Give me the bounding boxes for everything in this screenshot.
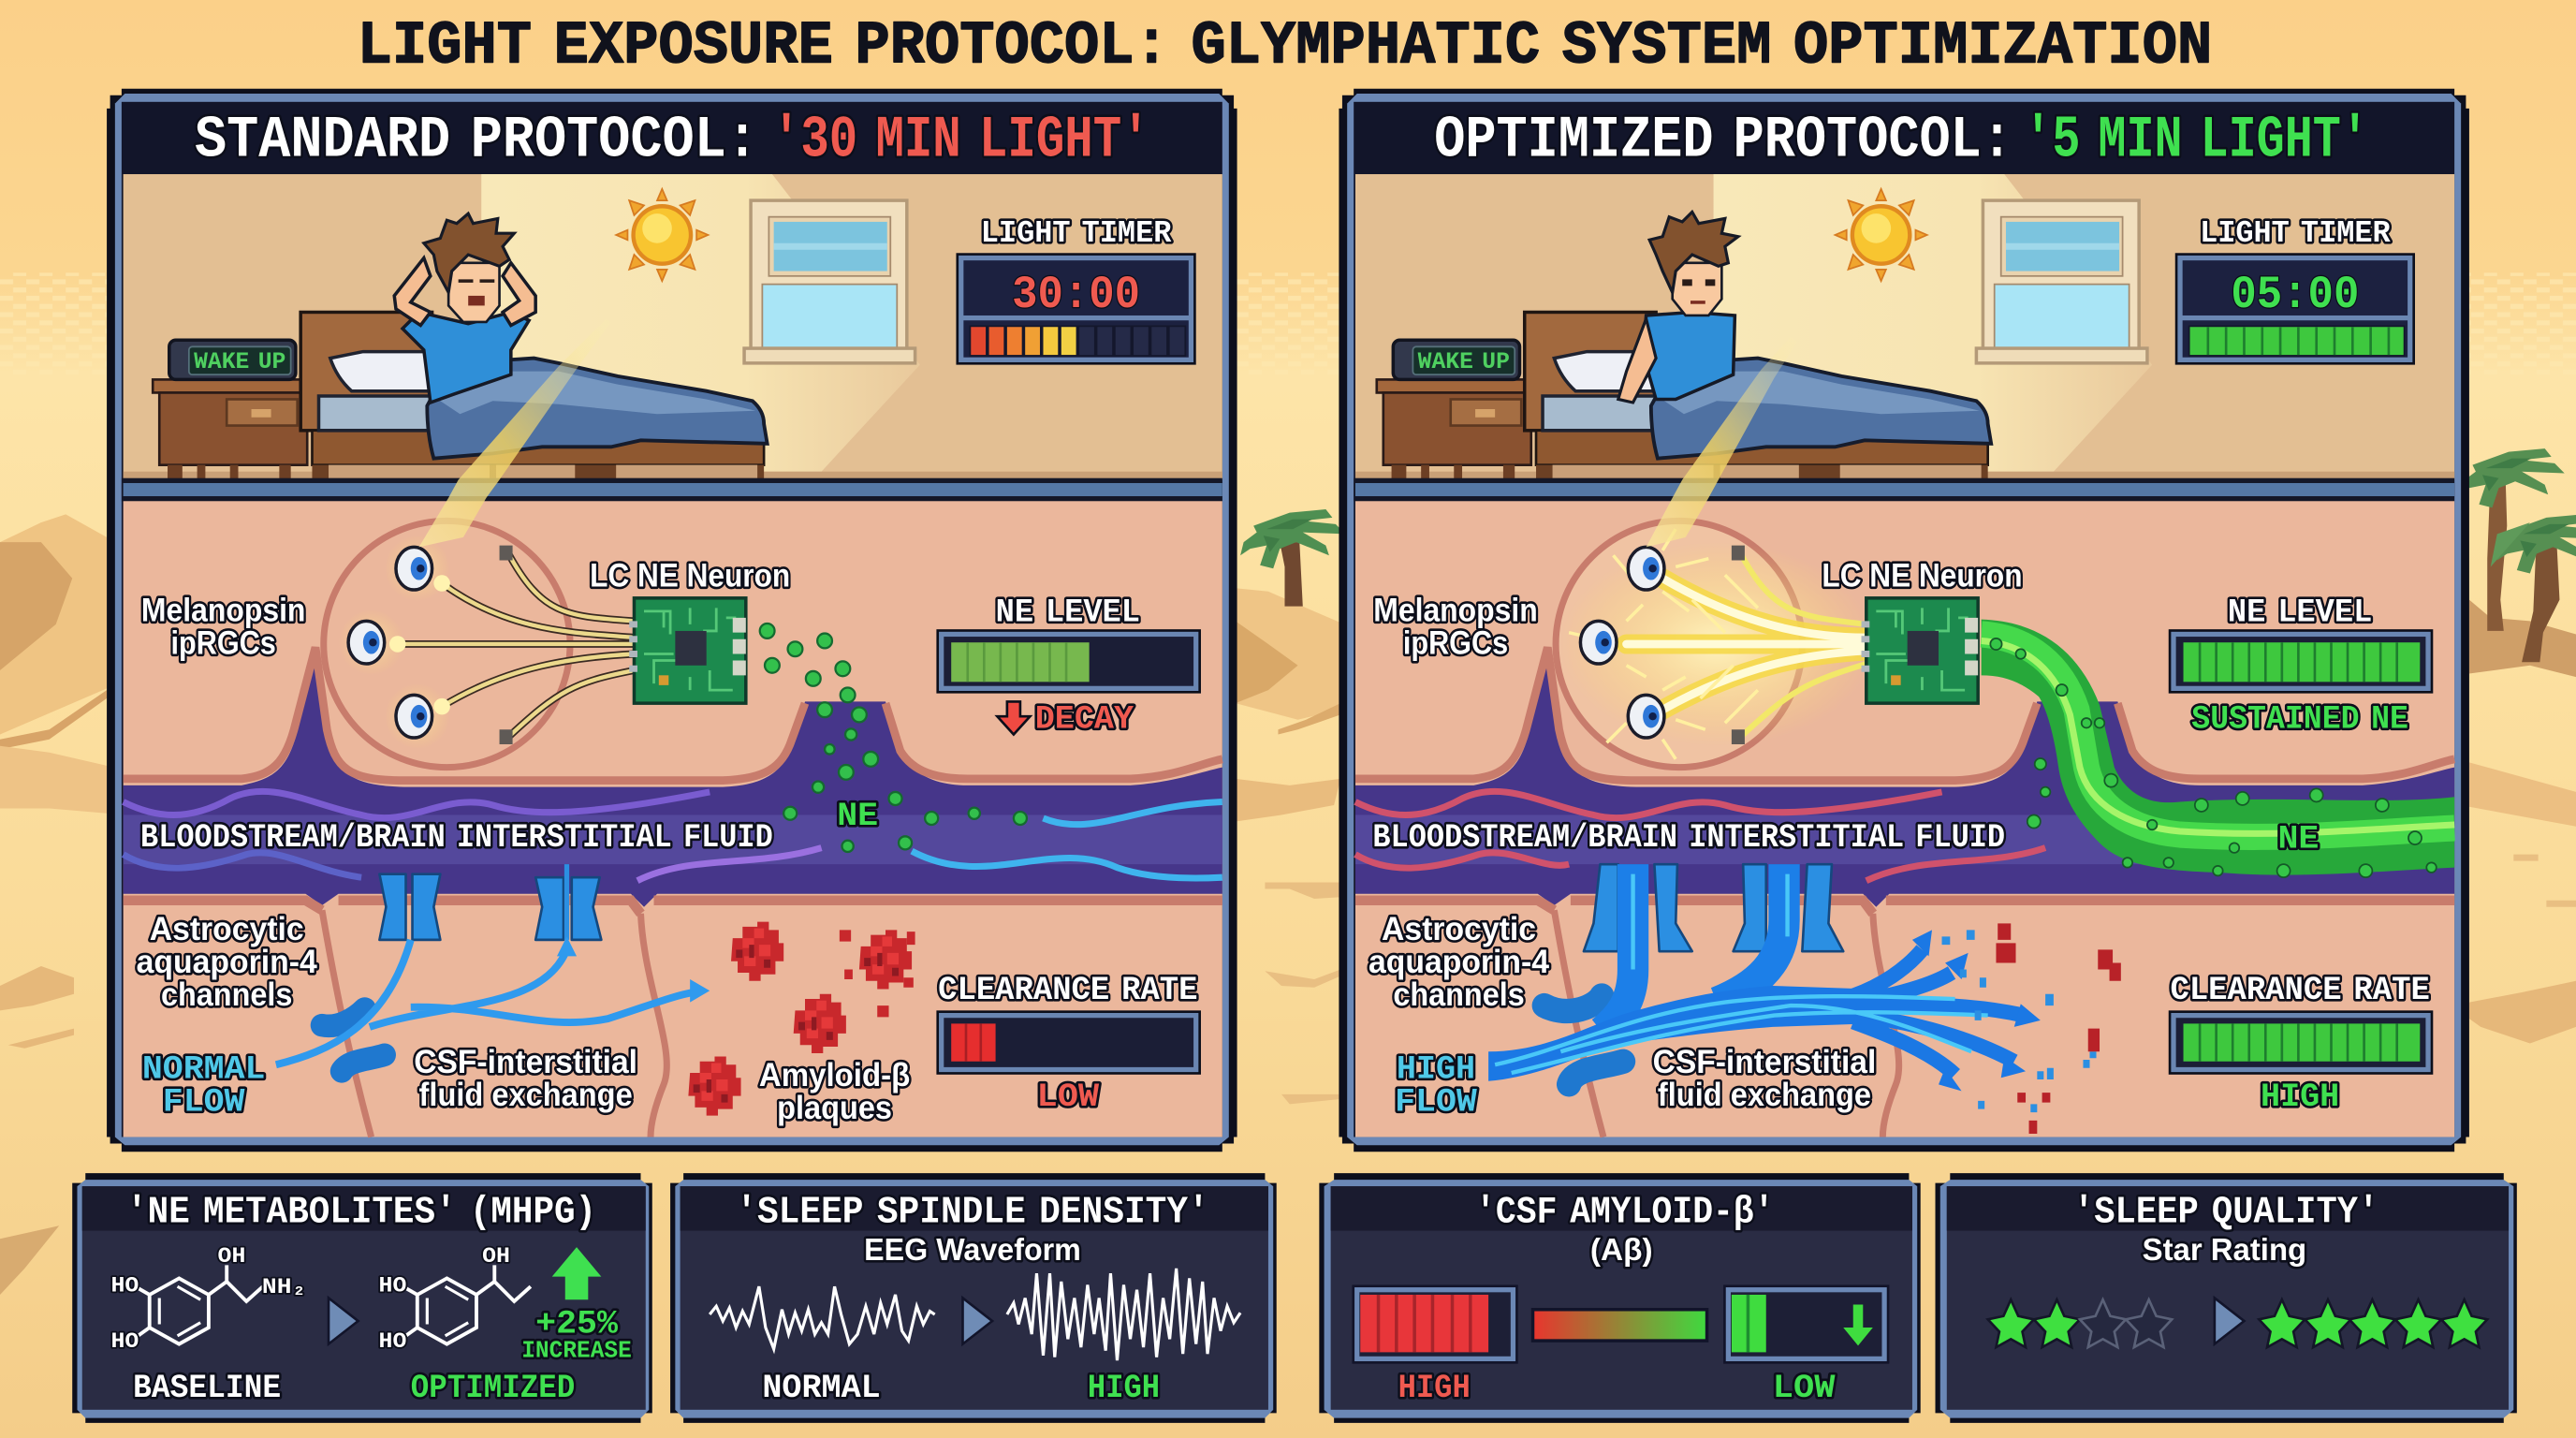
green NE stream <box>1982 620 2454 875</box>
amyloid plaques <box>688 922 915 1116</box>
NE level gauge: NE LEVEL <box>2228 594 2372 631</box>
gradient transition bar <box>1533 1310 1707 1341</box>
label: amyloid plaques <box>759 1057 910 1126</box>
label: high: HIGH <box>1398 1370 1471 1407</box>
panel heading: standard: STANDARD PROTOCOL: <box>195 107 758 174</box>
title: LIGHT EXPOSURE PROTOCOL: GLYMPHATIC SYSTEM OPTIMIZATION <box>358 13 2212 81</box>
label: optimized: OPTIMIZED <box>411 1370 575 1407</box>
label: Astrocytic aquaporin-4 channels: aquaporin-4 <box>137 944 317 980</box>
NE level gauge: DECAY <box>1035 700 1134 738</box>
label: normal flow: NORMAL <box>142 1050 265 1088</box>
chart: high EEG <box>1007 1269 1240 1360</box>
label: Astrocytic aquaporin-4 channels <box>1368 911 1550 1013</box>
label: Melanopsin ipRGCs: Melanopsin <box>1373 592 1538 628</box>
arrow <box>962 1298 992 1344</box>
molecule: baseline: HO <box>110 1273 139 1298</box>
aquaporin channels <box>379 864 601 940</box>
label: bloodstream: BLOODSTREAM/BRAIN INTERSTITIAL FLUID <box>1372 819 2005 857</box>
molecule: baseline <box>110 1244 306 1354</box>
label: baseline: BASELINE <box>133 1370 281 1407</box>
icon: window <box>744 200 915 363</box>
panel: standard protocol <box>107 89 1237 1152</box>
normal CSF flow arrows <box>276 936 710 1071</box>
label: normal flow: FLOW <box>163 1083 245 1121</box>
label: CSF exchange: fluid exchange <box>1658 1077 1871 1113</box>
metric card: NE metabolites <box>72 1173 652 1423</box>
NE level gauge <box>2169 594 2433 738</box>
label: high flow <box>1395 1050 1478 1121</box>
label: amyloid plaques: Amyloid-β <box>759 1057 910 1093</box>
retinal ganglion sphere <box>324 521 634 768</box>
bed and nightstand <box>153 312 768 479</box>
molecule: baseline: NH₂ <box>262 1275 306 1299</box>
light timer: 30:00 <box>1012 269 1140 321</box>
label: Astrocytic aquaporin-4 channels: channels <box>161 976 292 1013</box>
label: Astrocytic aquaporin-4 channels <box>137 911 317 1013</box>
brain and bloodstream section: standard <box>124 501 1222 1137</box>
clearance gauge: CLEARANCE RATE <box>938 972 1197 1009</box>
label: NE: NE <box>837 798 878 835</box>
label: Astrocytic aquaporin-4 channels: Astrocytic <box>1382 911 1536 947</box>
stream particles <box>1990 638 2437 877</box>
icon: sun <box>616 189 708 281</box>
callout: +25% increase <box>521 1305 632 1365</box>
molecule: optimized <box>379 1244 531 1354</box>
light timer: LIGHT TIMER <box>2200 216 2391 252</box>
wave lines <box>1355 791 2045 881</box>
label: star rating: Star Rating <box>2143 1233 2306 1268</box>
NE level gauge: NE LEVEL <box>996 594 1140 631</box>
card heading: 'CSF AMYLOID-β' <box>1475 1192 1775 1235</box>
callout: +25% increase: INCREASE <box>521 1337 632 1365</box>
card heading: 'NE METABOLITES' (MHPG) <box>126 1192 596 1235</box>
label: Melanopsin ipRGCs <box>1373 592 1538 662</box>
label: normal flow <box>142 1050 265 1121</box>
NE particles <box>760 624 1027 852</box>
molecule: baseline: OH <box>218 1244 245 1269</box>
panel: optimized protocol <box>1339 89 2469 1152</box>
icon: increase arrow <box>552 1247 601 1299</box>
label: A-beta: (Aβ) <box>1590 1233 1653 1268</box>
icon: window <box>1976 200 2147 363</box>
clearance gauge <box>936 972 1201 1116</box>
left dunes <box>0 514 107 734</box>
light beam <box>419 318 611 547</box>
clearance gauge: LOW <box>1036 1078 1100 1116</box>
arrow <box>329 1298 359 1344</box>
callout: +25% increase: +25% <box>535 1305 619 1343</box>
label: CSF exchange: CSF-interstitial <box>1653 1044 1876 1080</box>
brain and bloodstream section: optimized <box>1355 501 2454 1137</box>
clearance gauge: HIGH <box>2261 1078 2339 1116</box>
panel heading: standard: '30 MIN LIGHT' <box>772 107 1150 174</box>
character: awake with hands on head <box>394 213 535 403</box>
center dunes <box>1236 588 1340 720</box>
scattered particles <box>1942 923 2121 1134</box>
label: Melanopsin ipRGCs: ipRGCs <box>1403 625 1508 662</box>
bed and nightstand <box>1377 312 1991 479</box>
icon: palm trees right <box>2459 448 2576 662</box>
molecule: optimized: HO <box>379 1329 406 1354</box>
panel heading: standard <box>195 107 1150 174</box>
light timer <box>2175 216 2415 365</box>
alarm label: WAKE UP <box>1418 350 1510 375</box>
molecule: baseline: HO <box>110 1329 139 1354</box>
right dunes <box>2469 600 2576 677</box>
light beam <box>1647 337 1797 547</box>
aquaporin channels enlarged <box>1584 864 1843 951</box>
label: Melanopsin ipRGCs: Melanopsin <box>141 592 305 628</box>
card heading: 'SLEEP QUALITY' <box>2073 1192 2378 1235</box>
icon: LC NE neuron chip <box>1862 598 1978 703</box>
molecule: optimized: OH <box>482 1244 510 1269</box>
label: amyloid plaques: plaques <box>777 1090 892 1126</box>
label: Astrocytic aquaporin-4 channels: Astrocytic <box>150 911 304 947</box>
label: CSF exchange <box>414 1044 637 1113</box>
label: bloodstream: BLOODSTREAM/BRAIN INTERSTITIAL FLUID <box>140 819 773 857</box>
light timer: LIGHT TIMER <box>981 216 1171 252</box>
retinal ganglion sphere with bright signal <box>1556 521 1873 768</box>
clearance gauge: CLEARANCE RATE <box>2170 972 2430 1009</box>
high CSF flow <box>1488 864 2041 1091</box>
label: Astrocytic aquaporin-4 channels: channels <box>1393 976 1525 1013</box>
label: LC NE Neuron: LC NE Neuron <box>1822 558 2023 594</box>
metric card: sleep quality <box>1936 1173 2517 1423</box>
label: Astrocytic aquaporin-4 channels: aquaporin-4 <box>1368 944 1550 980</box>
bar: high <box>1352 1284 1518 1364</box>
label: high: HIGH <box>1088 1370 1160 1407</box>
label: normal: NORMAL <box>762 1370 881 1407</box>
light timer: 05:00 <box>2231 269 2359 321</box>
stars after <box>2259 1299 2487 1347</box>
icon: decay arrow <box>997 701 1030 734</box>
panel heading: optimized: OPTIMIZED PROTOCOL: <box>1434 107 2012 174</box>
metric card: sleep spindle density <box>670 1173 1277 1423</box>
metric card: CSF amyloid-beta <box>1319 1173 1921 1423</box>
icon: palm tree center <box>1240 509 1345 607</box>
label: CSF exchange <box>1653 1044 1876 1113</box>
NE level gauge: SUSTAINED NE <box>2191 700 2408 738</box>
molecule: optimized: HO <box>379 1273 406 1298</box>
label: CSF exchange: fluid exchange <box>419 1077 633 1113</box>
label: Melanopsin ipRGCs: ipRGCs <box>171 625 276 662</box>
melanopsin eyes <box>1580 546 1745 744</box>
icon: sun <box>1835 189 1927 281</box>
label: low: LOW <box>1773 1370 1836 1407</box>
chart: normal EEG <box>710 1286 935 1349</box>
label: high flow: HIGH <box>1397 1050 1475 1088</box>
stars before <box>1988 1299 2172 1347</box>
bedroom scene: standard <box>124 174 1222 479</box>
clearance gauge <box>2169 972 2433 1116</box>
panel heading: optimized: '5 MIN LIGHT' <box>2024 107 2369 174</box>
wave lines <box>124 791 1222 881</box>
arrow <box>2215 1298 2244 1344</box>
melanopsin eyes <box>339 536 513 749</box>
sparks <box>1569 529 1758 759</box>
label: CSF exchange: CSF-interstitial <box>414 1044 637 1080</box>
label: high flow: FLOW <box>1395 1083 1478 1121</box>
label: EEG waveform: EEG Waveform <box>864 1233 1081 1268</box>
character: calm sitting <box>1618 212 1738 403</box>
label: LC NE Neuron: LC NE Neuron <box>590 558 790 594</box>
card heading: 'SLEEP SPINDLE DENSITY' <box>736 1192 1209 1235</box>
bar: low <box>1723 1284 1889 1364</box>
icon: LC NE neuron chip <box>629 598 746 703</box>
light timer <box>956 216 1196 365</box>
label: NE: NE <box>2277 821 2319 858</box>
alarm label: WAKE UP <box>194 350 285 375</box>
bedroom scene: optimized <box>1355 174 2454 479</box>
NE level gauge <box>936 594 1201 738</box>
label: Melanopsin ipRGCs <box>141 592 305 662</box>
